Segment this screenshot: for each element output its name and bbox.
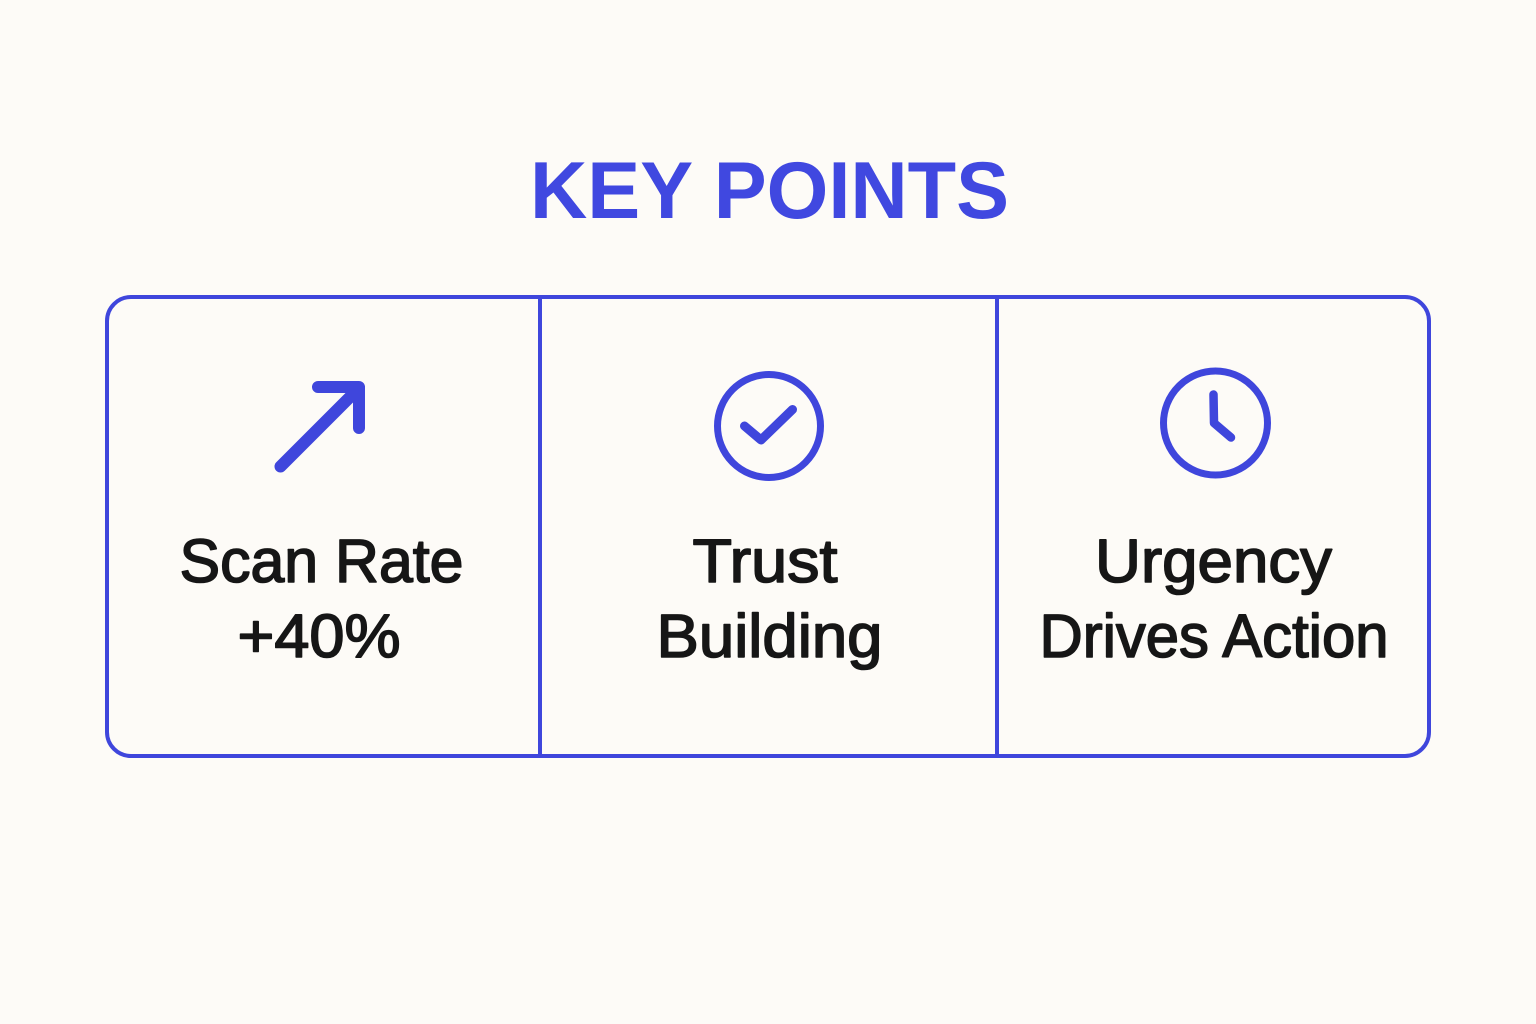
label: trust building: [656, 527, 882, 670]
icon: up-right arrow: [280, 387, 359, 466]
panel: scan rate: [180, 387, 464, 670]
label: scan rate: +40%: [238, 602, 400, 670]
label: trust building: Trust: [692, 527, 838, 595]
icon: check circle: [718, 374, 820, 478]
title: KEY POINTS: [530, 146, 1009, 236]
label: urgency drives action: Drives Action: [1040, 602, 1388, 670]
label: scan rate: [180, 527, 464, 670]
panel: trust building: [656, 374, 882, 670]
label: trust building: Building: [656, 602, 882, 670]
label: scan rate: Scan Rate: [180, 527, 464, 595]
label: urgency drives action: [1040, 527, 1388, 670]
panel: key points frame: [107, 297, 1429, 756]
icon: clock: [1164, 371, 1268, 475]
label: urgency drives action: Urgency: [1095, 527, 1333, 595]
panel: urgency: [1040, 371, 1388, 670]
